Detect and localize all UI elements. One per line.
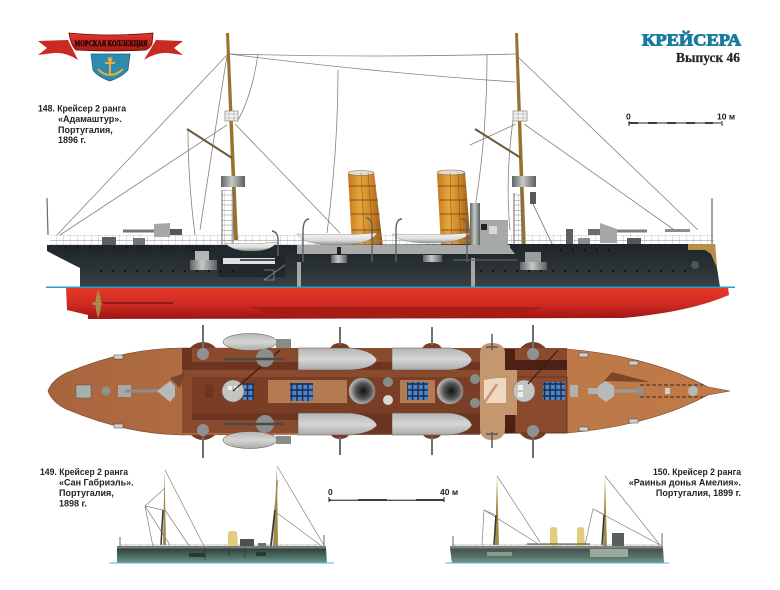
- bow gun: [47, 198, 712, 245]
- bilge keel: [250, 307, 543, 318]
- midship deck: [182, 348, 567, 433]
- caption: ship 150: 150. Крейсер 2 ранга: [653, 467, 742, 477]
- hull: black topside: [47, 244, 720, 287]
- superstructure band: [297, 245, 510, 254]
- caption: ship 149: Португалия,: [59, 488, 114, 498]
- caption: ship 149: 149. Крейсер 2 ранга: [40, 467, 129, 477]
- deck railings: [50, 235, 714, 245]
- caption: ship 148: 1896 г.: [58, 135, 86, 145]
- caption: ship 149: «Сан Габриэль».: [59, 478, 134, 488]
- anchor: [691, 261, 699, 269]
- scale bar: 10 m: [626, 112, 735, 126]
- skylights: [243, 382, 565, 401]
- small ship 149: [109, 466, 334, 564]
- lifeboats plan: [223, 334, 472, 448]
- caption: ship 149: [40, 467, 134, 508]
- scale bar: 10 m: 0: [626, 112, 631, 122]
- issue number: Выпуск 46: [676, 50, 740, 65]
- mast: fore: [475, 33, 555, 253]
- boat davits: [272, 218, 467, 262]
- caption: ship 150: [629, 467, 742, 498]
- scale bar: 10 m: 10 м: [717, 112, 735, 122]
- caption: ship 148: Португалия,: [58, 125, 113, 135]
- caption: ship 148: [38, 104, 127, 145]
- ribbon title: МОРСКАЯ КОЛЛЕКЦИЯ: [74, 39, 148, 48]
- caption: ship 148: 148. Крейсер 2 ранга: [38, 104, 127, 114]
- stern gun: [102, 223, 182, 245]
- scale bar: 40 m: [328, 487, 458, 502]
- caption: ship 150: «Раинья донья Амелия».: [629, 478, 741, 488]
- icon: anchor shield: [91, 54, 130, 81]
- propeller and shaft: [91, 290, 173, 318]
- caption: ship 148: «Адамаштур».: [58, 114, 122, 124]
- portholes: [65, 248, 690, 271]
- masts plan: [222, 350, 558, 402]
- hull fittings: [114, 353, 638, 431]
- funnels: [348, 170, 471, 247]
- tan panels: [268, 380, 347, 403]
- scale bar: 40 m: 0: [328, 487, 333, 497]
- waterline: [46, 286, 735, 288]
- mast: aft: [187, 33, 245, 246]
- main ship side profile: [47, 33, 729, 319]
- hull plan: [48, 348, 730, 435]
- sponsons plan: [186, 342, 549, 440]
- bow gun plan: [570, 372, 703, 402]
- title: КРЕЙСЕРА: [642, 30, 741, 50]
- small ship 150: [445, 476, 669, 564]
- lifeboats side: [225, 233, 470, 251]
- logo: naval collection ribbon and anchor shield: [38, 33, 183, 81]
- funnels plan: [349, 374, 480, 408]
- rigging: [57, 54, 698, 235]
- bow ornament: [688, 244, 717, 268]
- sponsons side: [190, 247, 547, 270]
- hull: underwater red: [66, 287, 729, 319]
- gray ladders on hull: [264, 258, 517, 287]
- side guns plan: [203, 325, 533, 458]
- scale bar: 40 m: 40 м: [440, 487, 458, 497]
- deck plan: [48, 325, 730, 458]
- caption: ship 149: 1898 г.: [59, 498, 87, 508]
- bridge: [480, 334, 517, 448]
- stern gun plan: [76, 373, 213, 402]
- dark shadow bands: [182, 348, 480, 435]
- caption: ship 150: Португалия, 1899 г.: [656, 488, 741, 498]
- boat rails and wheels: [224, 339, 291, 444]
